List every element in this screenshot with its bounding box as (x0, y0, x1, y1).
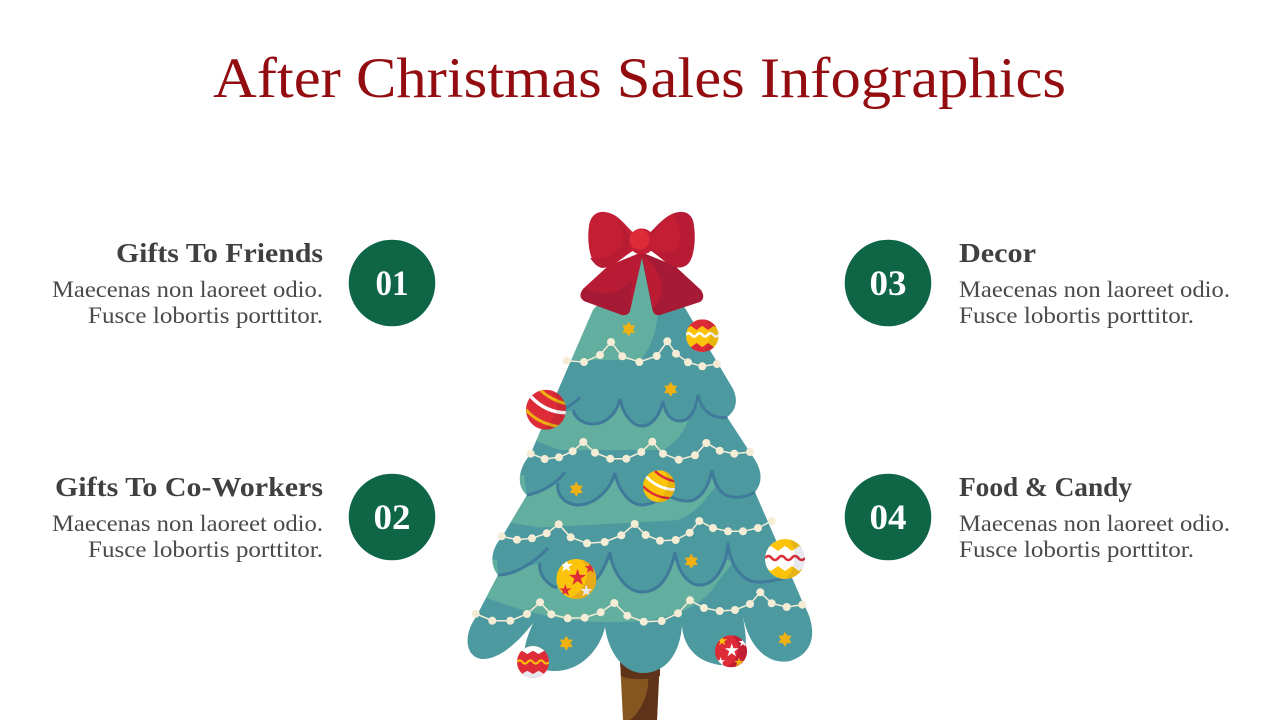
bow knot (629, 228, 655, 254)
text block: Gifts To Co-Workers description (52, 511, 323, 563)
ornament: white and red wave (517, 646, 549, 678)
text block: Gifts To Friends description (52, 277, 323, 329)
garland 4 (472, 588, 806, 626)
bow left tail (580, 252, 642, 315)
ornament: red striped (526, 390, 566, 430)
panel: Food & Candy (845, 472, 1230, 563)
text block: Decor description: Fusce lobortis porttitor. (959, 303, 1194, 329)
text block: Gifts To Friends description: Fusce lobortis porttitor. (88, 303, 323, 329)
text block: Decor description (959, 277, 1230, 329)
number badge 01 (349, 240, 435, 326)
number badge 03 (845, 240, 931, 326)
text block: Decor description: Maecenas non laoreet odio. (959, 277, 1230, 303)
tree trunk (620, 660, 660, 720)
text block: Gifts To Co-Workers description: Maecenas non laoreet odio. (52, 511, 323, 537)
bow (580, 212, 703, 315)
number badge 04 (845, 474, 931, 560)
ornament: yellow striped (643, 470, 675, 502)
ornament: red with stars (715, 635, 748, 667)
gold stars (560, 322, 792, 651)
heading: Gifts To Co-Workers: Gifts To Co-Workers (55, 472, 323, 502)
panel: Decor (845, 238, 1230, 329)
garland 2 (527, 438, 754, 464)
number badge 02 (349, 474, 435, 560)
heading: Decor: Decor (959, 238, 1036, 268)
number badge 03: 03 (870, 263, 906, 303)
panel: Gifts To Co-Workers (52, 472, 435, 563)
panel: Gifts To Friends (52, 238, 435, 329)
tree foliage (468, 250, 812, 673)
number badge 04: 04 (870, 497, 906, 537)
ornament: red and yellow wave (686, 319, 719, 352)
text block: Food & Candy description: Fusce lobortis porttitor. (959, 537, 1194, 563)
ornament: yellow with stars (556, 559, 596, 599)
ornament: white and yellow wave (765, 539, 805, 579)
title: After Christmas Sales Infographics (213, 47, 1066, 110)
bow left loop (588, 212, 642, 268)
number badge 01: 01 (376, 263, 408, 303)
heading: Gifts To Friends: Gifts To Friends (116, 238, 323, 268)
heading: Food & Candy: Food & Candy (959, 472, 1133, 502)
number badge 02: 02 (374, 497, 410, 537)
text block: Food & Candy description: Maecenas non laoreet odio. (959, 511, 1230, 537)
bow right loop (642, 212, 695, 268)
text block: Gifts To Friends description: Maecenas non laoreet odio. (52, 277, 323, 303)
christmas tree illustration (468, 212, 812, 720)
garland 1 (563, 337, 721, 370)
garland 3 (498, 517, 776, 547)
text block: Food & Candy description (959, 511, 1230, 563)
bow right tail (641, 252, 703, 315)
text block: Gifts To Co-Workers description: Fusce lobortis porttitor. (88, 537, 323, 563)
